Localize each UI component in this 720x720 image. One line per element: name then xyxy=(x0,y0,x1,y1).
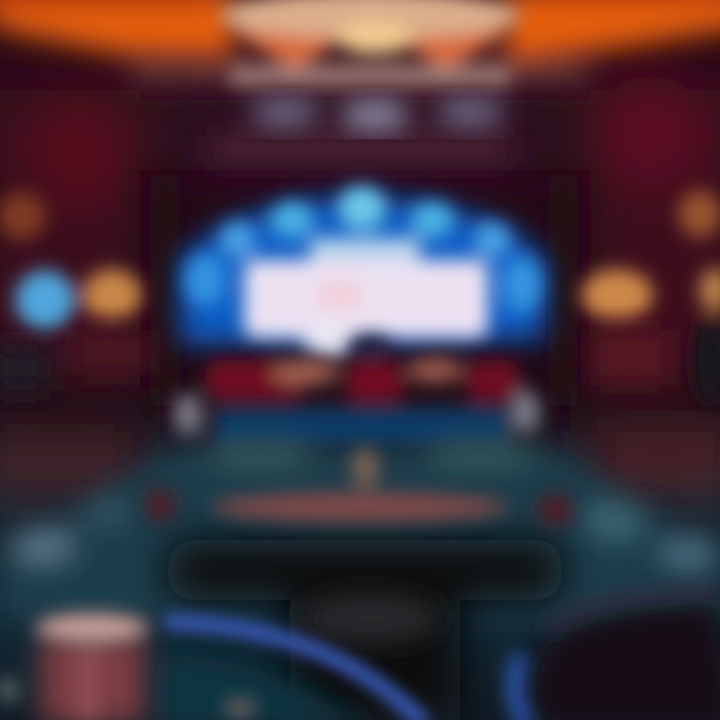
lamp bases xyxy=(0,330,670,390)
table xyxy=(144,448,573,720)
ceiling: orange band and chandelier xyxy=(0,0,720,128)
seats row xyxy=(174,335,540,448)
popcorn box xyxy=(40,635,145,720)
foreground blue arc xyxy=(165,622,425,720)
upper stage band xyxy=(150,135,578,405)
foreground right arc xyxy=(528,600,720,720)
stage screen xyxy=(180,186,545,356)
walls xyxy=(0,75,720,490)
floor xyxy=(0,442,720,620)
lamps xyxy=(0,190,720,405)
